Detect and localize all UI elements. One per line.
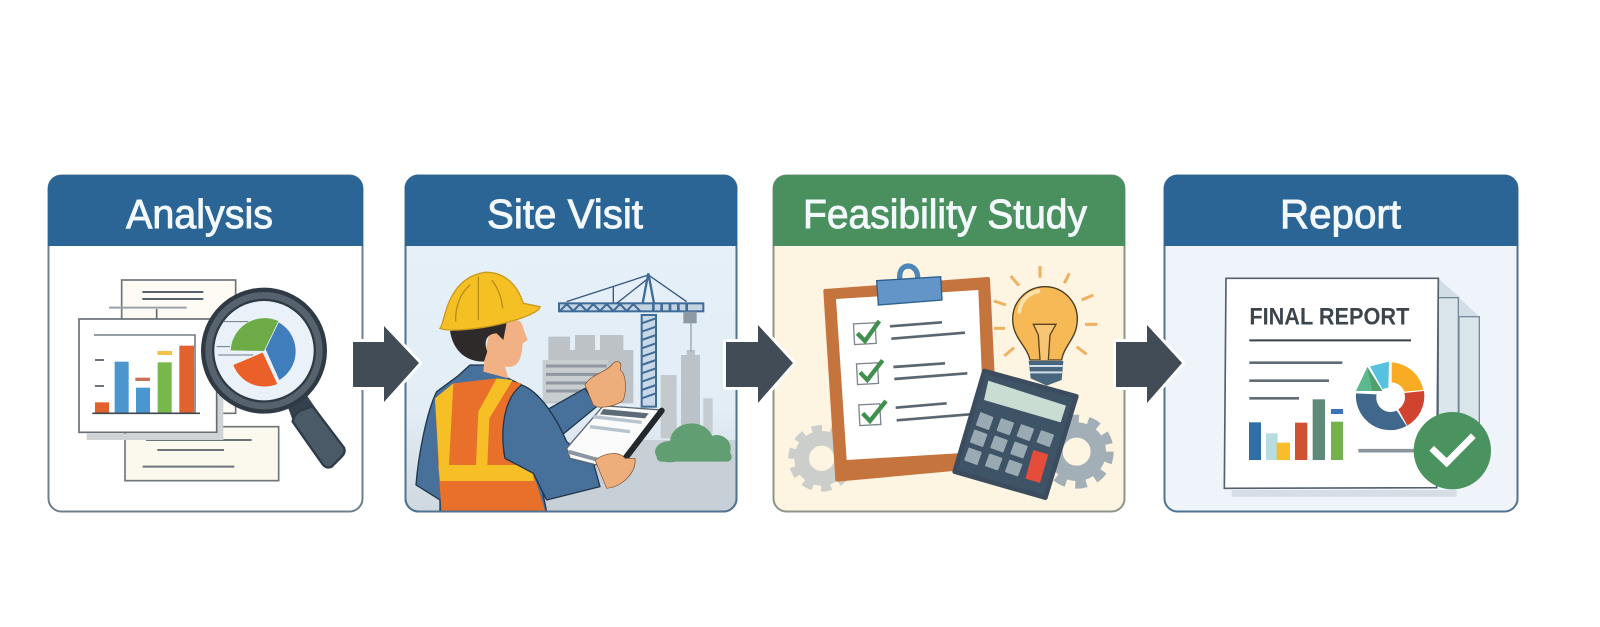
header: Analysis bbox=[48, 175, 363, 246]
ground bbox=[543, 440, 738, 512]
icon: magnifying glass bbox=[201, 288, 345, 467]
heading: Report: Report bbox=[1280, 191, 1402, 237]
tablet bbox=[567, 406, 662, 465]
icon: light bulb bbox=[994, 266, 1097, 386]
document: bottom back sheet bbox=[125, 427, 279, 481]
pie chart bbox=[231, 318, 296, 387]
worker body bbox=[416, 365, 547, 513]
heading: Site Visit: Site Visit bbox=[487, 191, 644, 237]
arrow: Site Visit to Feasibility Study bbox=[726, 325, 793, 403]
arrow: Feasibility Study to Report bbox=[1116, 325, 1182, 403]
document: final report page bbox=[1224, 278, 1438, 488]
panel: Site Visit bbox=[405, 175, 738, 513]
icon: green check badge bbox=[1414, 412, 1491, 489]
hands bbox=[585, 361, 635, 488]
document: top back sheet bbox=[109, 280, 236, 413]
panel: Analysis bbox=[48, 175, 363, 512]
header: Site Visit bbox=[405, 175, 737, 246]
tower crane bbox=[559, 273, 703, 407]
heading: Feasibility Study: Feasibility Study bbox=[803, 191, 1087, 237]
icon: clipboard checklist bbox=[825, 266, 997, 480]
donut chart bbox=[1356, 362, 1424, 430]
title: FINAL REPORT: FINAL REPORT bbox=[1249, 303, 1410, 330]
head and helmet bbox=[440, 272, 540, 378]
illustration: documents and magnifier bbox=[79, 280, 345, 481]
header: Feasibility Study bbox=[773, 175, 1125, 246]
icon: gears bbox=[792, 419, 1109, 488]
buildings bbox=[543, 335, 713, 438]
illustration: worker at construction site bbox=[416, 272, 738, 513]
bar chart bbox=[1249, 399, 1343, 460]
header: Report bbox=[1164, 175, 1518, 246]
arrow: Analysis to Site Visit bbox=[353, 326, 419, 402]
illustration: checklist, bulb, calculator bbox=[792, 266, 1109, 498]
near arm bbox=[503, 385, 600, 500]
bush bbox=[655, 423, 732, 462]
safety vest bbox=[435, 378, 546, 513]
document: bar chart sheet bbox=[79, 309, 223, 440]
checklist items bbox=[853, 321, 970, 426]
panel: Feasibility Study bbox=[773, 175, 1125, 512]
far arm bbox=[547, 388, 597, 437]
document stack bbox=[1232, 278, 1479, 497]
illustration: final report bbox=[1224, 278, 1491, 497]
heading: Analysis: Analysis bbox=[126, 191, 273, 237]
bar chart bbox=[92, 346, 200, 413]
panel: Report bbox=[1164, 175, 1518, 512]
icon: calculator bbox=[955, 371, 1076, 498]
clip bbox=[877, 266, 942, 305]
